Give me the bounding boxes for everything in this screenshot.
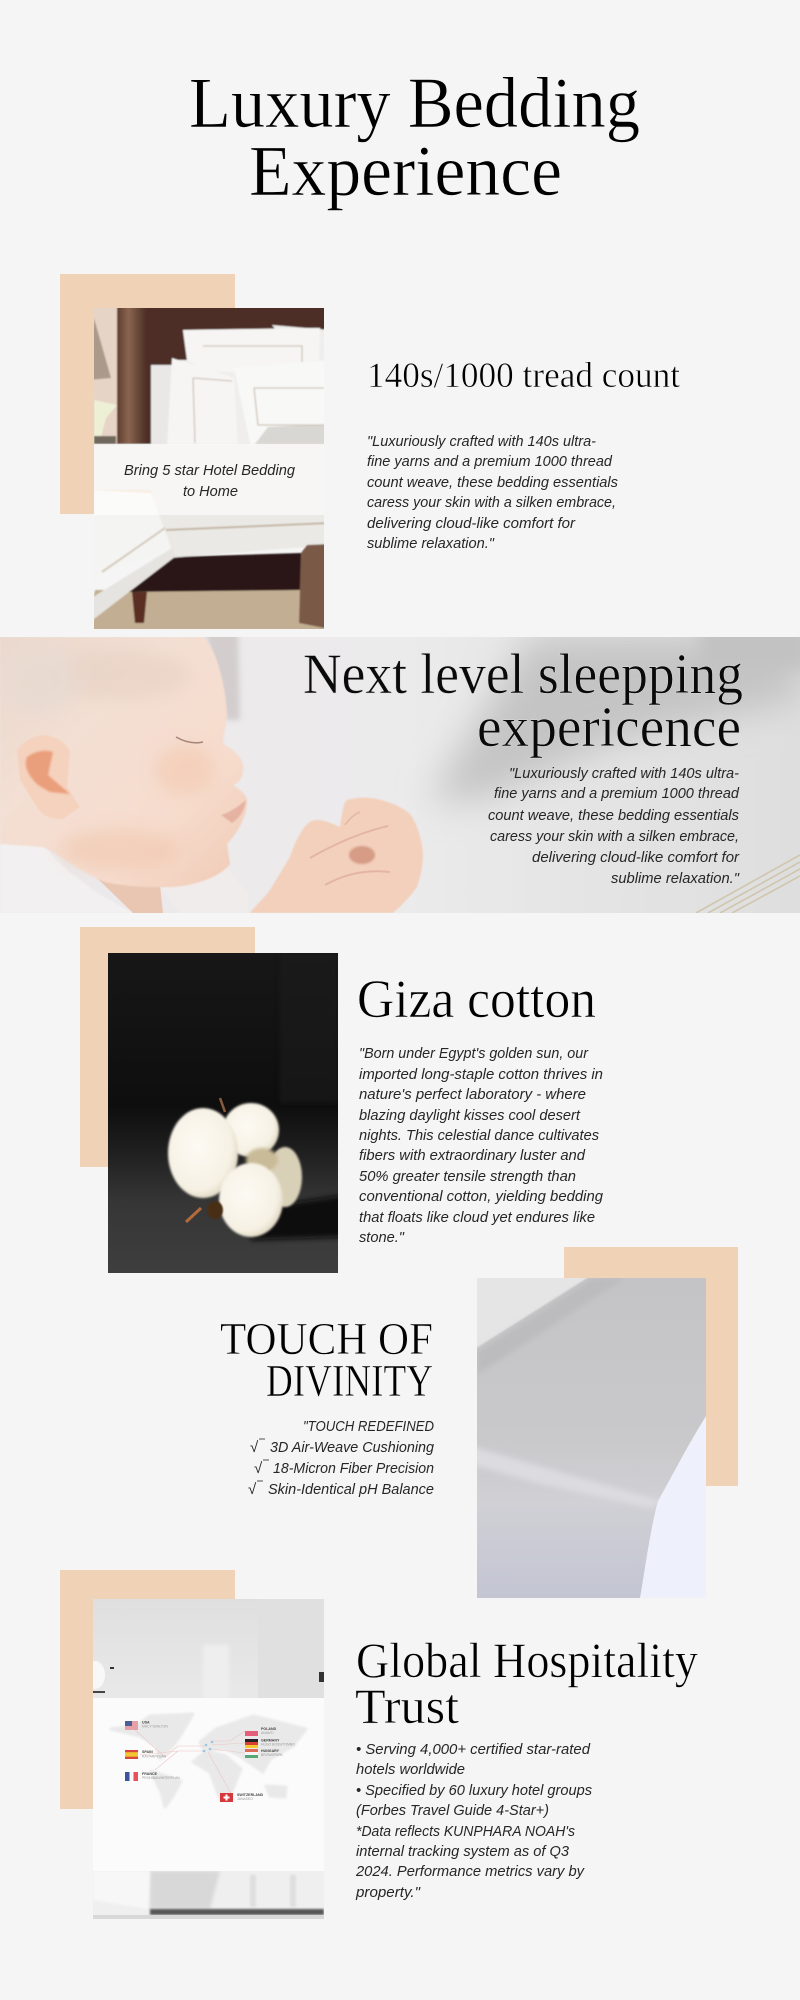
white map panel [93, 1698, 324, 1871]
heading: next level: expericence [477, 696, 741, 759]
text block: global trust: *Data reflects KUNPHARA NOAH's [356, 1823, 575, 1840]
flag and label: Hungary: HUNGARY [261, 1749, 280, 1753]
text block: giza cotton: stone." [359, 1229, 405, 1246]
text block: next level: fine yarns and a premium 1000 thread [494, 785, 740, 802]
world map [111, 1714, 306, 1807]
flag and label: Switzerland: JANASEO [237, 1797, 253, 1801]
heading: touch of divinity: TOUCH OF [220, 1314, 433, 1364]
photo: hotel bed [88, 302, 330, 635]
photo: room with world map [85, 1599, 324, 1919]
text block: next level: sublime relaxation." [611, 870, 740, 887]
panel: giza cotton [80, 927, 604, 1273]
text block: giza cotton [359, 1045, 604, 1246]
flag and label: Poland [245, 1727, 277, 1736]
text block: global trust: internal tracking system as of Q3 [356, 1843, 570, 1860]
flag and label: Spain: SPAIN [142, 1750, 153, 1754]
heading: thread count: 140s/1000 tread count [367, 355, 680, 395]
peach backing block [60, 1570, 235, 1809]
title: Luxury Bedding [189, 63, 640, 143]
heading: global hospitality trust: Trust [355, 1678, 459, 1734]
photo: cotton boll [108, 953, 345, 1273]
title: Experience [249, 131, 562, 211]
heading: next level [303, 643, 743, 759]
text block: giza cotton: conventional cotton, yielding bedding [359, 1188, 604, 1205]
text block: giza cotton: nature's perfect laboratory - where [359, 1086, 586, 1103]
heading: next level: Next level sleepping [303, 643, 743, 706]
panel: global hospitality trust [60, 1570, 698, 1919]
text block: thread count: sublime relaxation." [367, 535, 495, 552]
caption: Bring 5 star Hotel Bedding [124, 462, 296, 479]
peach backing block [60, 274, 235, 514]
text block: giza cotton: blazing daylight kisses cool desert [359, 1107, 581, 1124]
text block: global trust [355, 1741, 592, 1901]
flag and label: Spain: RAY/ARPEGAA [142, 1754, 167, 1758]
text block: touch list: Skin-Identical pH Balance [268, 1481, 434, 1498]
flag and label: USA: USA [142, 1720, 150, 1724]
flag and label: Germany: GERMANY [261, 1738, 280, 1742]
text block: next level: "Luxuriously crafted with 140s ultra- [509, 765, 739, 782]
flag and label: Spain [125, 1750, 167, 1759]
text block: touch list: √ [250, 1439, 259, 1456]
panel: next level sleeping banner [0, 620, 800, 913]
photo: sleeping baby [0, 620, 800, 913]
peach backing block [80, 927, 255, 1167]
text block: touch list: 18-Micron Fiber Precision [273, 1460, 434, 1477]
text block: next level: count weave, these bedding essentials [488, 807, 739, 824]
heading: touch of divinity: DIVINITY [266, 1356, 433, 1406]
flag and label: Germany [245, 1738, 295, 1748]
caption [124, 462, 296, 500]
flag and label: Poland: POLAND [261, 1727, 277, 1731]
flag and label: Switzerland [220, 1793, 264, 1802]
panel: thread count [60, 274, 680, 635]
heading: giza cotton: Giza cotton [357, 969, 596, 1029]
text block: thread count: caress your skin with a silken embrace, [367, 494, 616, 511]
text block: giza cotton: imported long-staple cotton thrives in [359, 1066, 603, 1083]
flag and label: Switzerland: SWITZERLAND [237, 1793, 264, 1797]
flag and label: France: PROHIBAN/INTERPLAN [142, 1776, 180, 1780]
flag and label: USA [125, 1720, 168, 1730]
peach backing block [564, 1247, 738, 1486]
text block: touch list: √ [248, 1481, 257, 1498]
text block: giza cotton: nights. This celestial dance cultivates [359, 1127, 599, 1144]
translucent caption band [94, 444, 324, 515]
flag and label: France: FRANCE [142, 1772, 158, 1776]
text block: thread count: delivering cloud-like comfort for [367, 515, 576, 532]
caption: to Home [183, 483, 238, 500]
heading: touch of divinity [220, 1314, 433, 1406]
text block: next level: delivering cloud-like comfort for [532, 849, 740, 866]
heading: global hospitality trust [355, 1632, 698, 1734]
text block: global trust: • Specified by 60 luxury hotel groups [356, 1782, 592, 1799]
text block: thread count: "Luxuriously crafted with 140s ultra- [367, 433, 596, 450]
text block: thread count: fine yarns and a premium 1000 thread [367, 453, 613, 470]
flag and label: France [125, 1772, 180, 1781]
photo: silk sheet [470, 1270, 706, 1598]
flag and label: Poland: ANANTI [261, 1731, 273, 1735]
text block: global trust: • Serving 4,000+ certified star-rated [356, 1741, 591, 1758]
text block: touch list [248, 1418, 435, 1498]
text block: touch list: 3D Air-Weave Cushioning [270, 1439, 435, 1456]
text block: giza cotton: 50% greater tensile strength than [359, 1168, 576, 1185]
text block: next level [488, 765, 740, 887]
text block: global trust: property." [355, 1884, 421, 1901]
text block: global trust: (Forbes Travel Guide 4-Star+) [356, 1802, 549, 1819]
heading: global hospitality trust: Global Hospitality [356, 1632, 698, 1688]
text block: thread count: count weave, these bedding essentials [367, 474, 618, 491]
flag and label: Germany: HUGO BOSS/TOMBO [261, 1742, 295, 1746]
text block: giza cotton: that floats like cloud yet endures like [359, 1209, 595, 1226]
text block: giza cotton: "Born under Egypt's golden sun, our [359, 1045, 589, 1062]
text block: next level: caress your skin with a silken embrace, [490, 828, 739, 845]
text block: thread count [367, 433, 618, 552]
flag and label: USA: MACY'S/HILTON [142, 1724, 168, 1728]
flag and label: Hungary: BROWSPARK [261, 1753, 284, 1757]
text block: global trust: 2024. Performance metrics vary by [355, 1863, 585, 1880]
text block: global trust: hotels worldwide [356, 1761, 465, 1778]
text block: touch list: √ [254, 1460, 263, 1477]
title [189, 63, 640, 211]
text block: touch list: "TOUCH REDEFINED [303, 1418, 434, 1435]
panel: touch of divinity [220, 1247, 738, 1598]
flag and label: Hungary [245, 1749, 284, 1758]
text block: giza cotton: fibers with extraordinary luster and [359, 1147, 586, 1164]
